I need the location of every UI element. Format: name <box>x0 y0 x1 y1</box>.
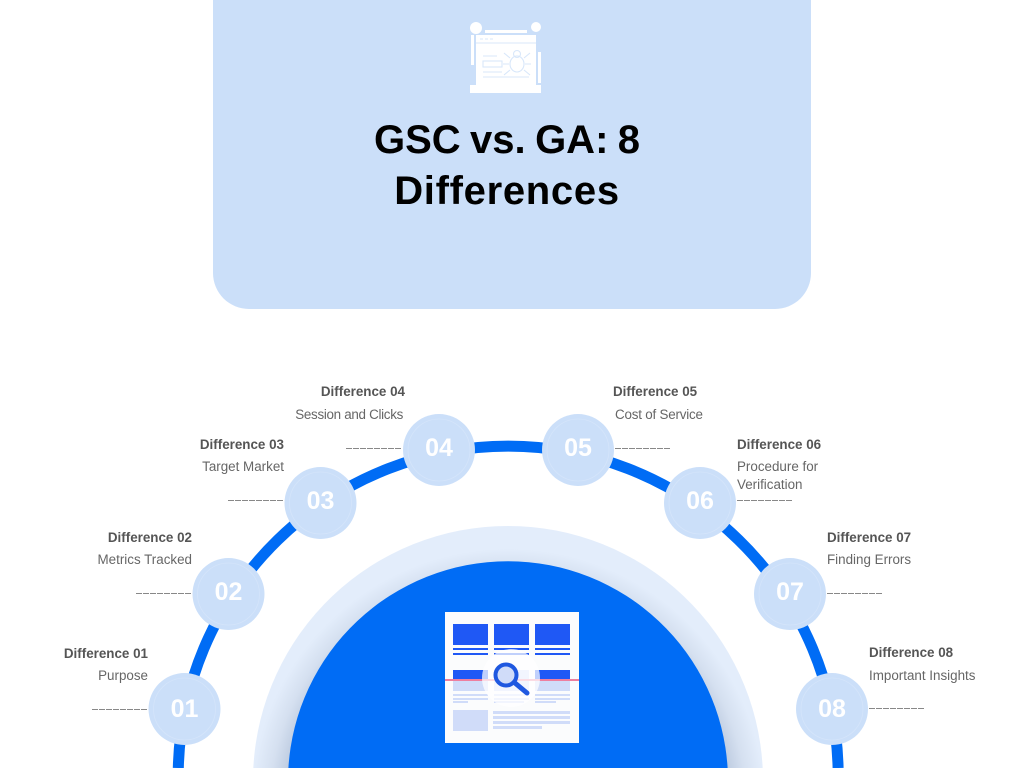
numbers: 03 <box>307 487 334 515</box>
label: difference 02: Metrics Tracked <box>98 552 192 567</box>
numbers: 01 <box>171 695 198 723</box>
label: difference 08: Important Insights <box>869 668 975 683</box>
numbers: 07 <box>776 578 804 606</box>
icon: web page with magnifier <box>445 612 579 743</box>
label: difference 06 <box>737 437 821 492</box>
label: difference 08: Difference 08 <box>869 645 953 660</box>
numbers: 04 <box>425 434 453 462</box>
label: difference 03: Difference 03 <box>200 437 284 452</box>
label: difference 02: Difference 02 <box>108 530 192 545</box>
label: difference 06: Difference 06 <box>737 437 821 452</box>
label: difference 04: Session and Clicks <box>295 407 403 422</box>
blue arc <box>178 446 838 768</box>
header panel <box>213 0 811 309</box>
label: difference 05 <box>613 384 703 422</box>
number circles <box>148 414 868 745</box>
label: difference 03 <box>200 437 284 474</box>
number circle inner rings <box>154 419 863 740</box>
numbers: 05 <box>564 434 592 462</box>
label: difference 02 <box>98 530 192 567</box>
title: GSC vs. GA: 8 <box>374 118 640 162</box>
label: difference 05: Cost of Service <box>615 407 703 422</box>
numbers: 02 <box>215 578 242 606</box>
numbers: 08 <box>818 695 846 723</box>
label: difference 01: Difference 01 <box>64 646 148 661</box>
label: difference 06: Verification <box>737 477 803 492</box>
numbers <box>171 434 846 723</box>
label: difference 05: Difference 05 <box>613 384 697 399</box>
label: difference 08 <box>869 645 975 683</box>
title <box>374 118 640 213</box>
label: difference 04 <box>295 384 405 422</box>
icon: browser with bug <box>470 22 541 93</box>
blue semicircle <box>288 561 728 768</box>
pale ring <box>253 526 763 768</box>
label: difference 07: Difference 07 <box>827 530 911 545</box>
label: difference 06: Procedure for <box>737 459 818 474</box>
label: difference 01 <box>64 646 148 683</box>
label: difference 04: Difference 04 <box>321 384 405 399</box>
title: Differences <box>394 169 620 213</box>
label: difference 01: Purpose <box>98 668 148 683</box>
label: difference 07 <box>827 530 911 567</box>
numbers: 06 <box>686 487 714 515</box>
label: difference 03: Target Market <box>202 459 284 474</box>
label: difference 07: Finding Errors <box>827 552 911 567</box>
